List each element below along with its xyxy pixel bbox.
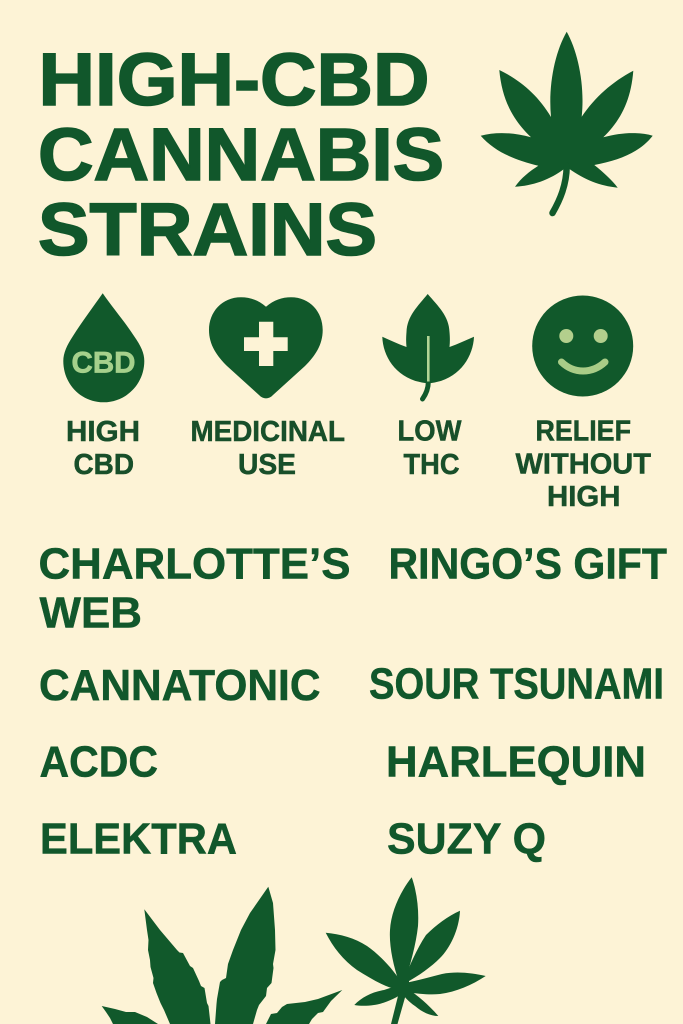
strain: Elektra: ELEKTRA (40, 816, 237, 864)
icon: heart with medical cross (209, 297, 323, 398)
label: medicinal use: MEDICINAL (190, 416, 345, 448)
label: low THC (398, 416, 462, 481)
label: high CBD: HIGH (66, 416, 140, 448)
strain: Ringo's Gift: RINGO’S GIFT (388, 540, 667, 588)
strain: Cannatonic: CANNATONIC (39, 662, 320, 710)
label: medicinal use: USE (238, 449, 296, 481)
label: medicinal use (190, 416, 345, 481)
title: HIGH-CBD (38, 38, 430, 121)
feature labels (66, 416, 651, 513)
label: high CBD: CBD (74, 449, 134, 481)
icon: large serrated leaf bottom (102, 887, 342, 1024)
icon: CBD drop (63, 293, 144, 402)
title: CANNABIS (38, 113, 444, 196)
icon: cannabis leaf top right (481, 32, 653, 213)
label: low THC: LOW (398, 416, 462, 448)
strain: Suzy Q: SUZY Q (387, 816, 546, 864)
icon: smiley face (532, 296, 633, 396)
title (38, 38, 444, 271)
title: STRAINS (38, 188, 377, 271)
label: relief without high: RELIEF (536, 416, 631, 448)
icon: CBD drop: CBD (72, 346, 136, 380)
label: relief without high: HIGH (547, 481, 620, 513)
label: relief without high: WITHOUT (516, 448, 651, 480)
strain: Charlotte's Web: CHARLOTTE’S (38, 540, 350, 588)
icon: small leaf bottom (326, 877, 486, 1024)
strain: ACDC: ACDC (40, 738, 158, 786)
label: relief without high (516, 416, 651, 513)
strain: Charlotte's Web: WEB (40, 590, 142, 638)
strain: Harlequin: HARLEQUIN (386, 738, 646, 786)
strain: Charlotte's Web (38, 540, 350, 638)
strain list (38, 540, 667, 864)
label: high CBD (66, 416, 140, 481)
label: low THC: THC (404, 449, 460, 481)
icon: low THC leaf (382, 294, 474, 399)
